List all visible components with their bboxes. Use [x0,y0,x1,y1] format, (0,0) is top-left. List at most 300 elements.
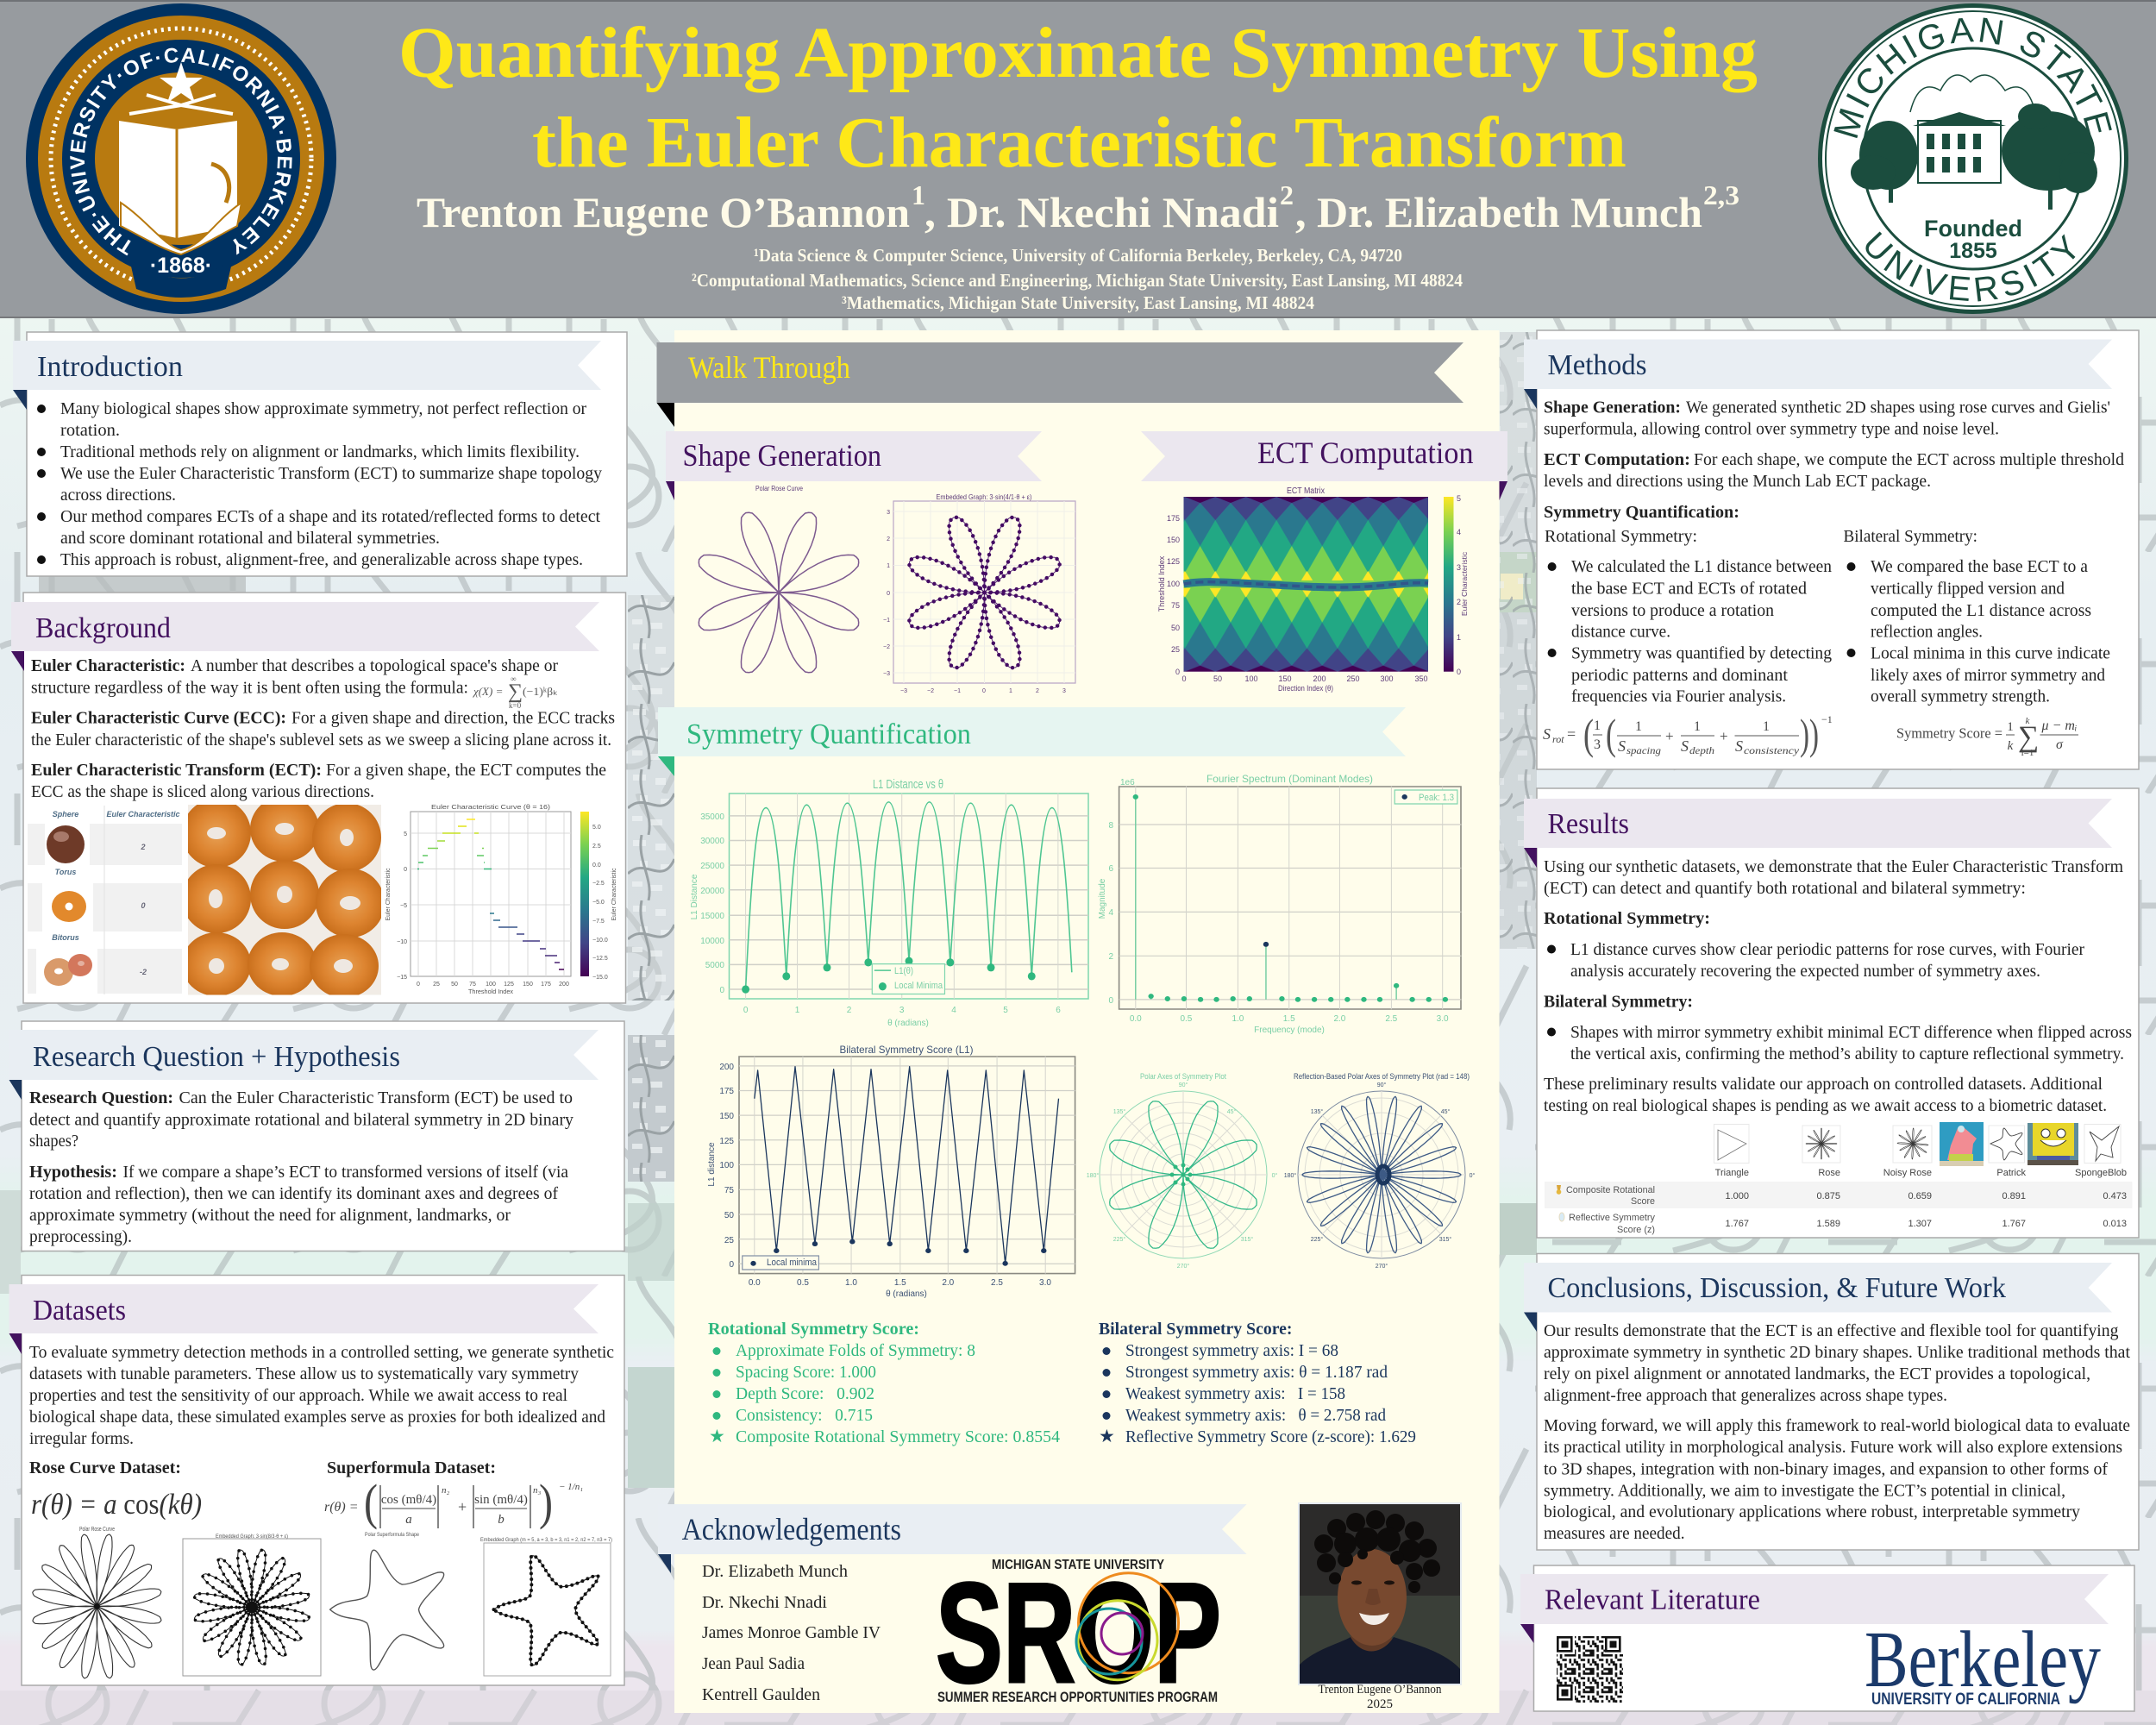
logo: SROP: MICHIGAN STATE UNIVERSITY [992,1558,1164,1572]
formula: rotational score: S [1618,737,1626,755]
background definitions text: the Euler characteristic of the shape's sublevel sets as we sweep a slicing plane across it. [31,731,611,750]
chart: Fourier spectrum: 4 [1108,908,1113,918]
QR code [1557,1636,1623,1703]
formula: Euler characteristic [472,674,558,710]
chart: reflection-based polar axes: 45° [1441,1108,1450,1115]
results table [1545,1122,2132,1235]
rotational symmetry score list: Approximate Folds of Symmetry: 8 [736,1341,975,1360]
chart: ECT matrix heatmap: Euler Characteristic [1460,551,1469,616]
chart: Fourier spectrum: Peak: 1.3 [1419,793,1454,803]
bilateral symmetry score list: Strongest symmetry axis: I = 68 [1125,1341,1338,1360]
chart: Euler characteristic curve: −10.0 [592,938,608,944]
table column labels: Noisy Rose [1883,1168,1932,1178]
chart: bilateral symmetry score: 100 [719,1161,734,1170]
panel: Methods [1524,330,2139,769]
formula: Euler characteristic: χ(X) = [472,685,503,698]
rotational symmetry score list: Depth Score: 0.902 [736,1384,874,1403]
chart: bilateral symmetry score: 125 [719,1137,734,1146]
background definitions text [31,656,615,801]
chart: ECT matrix heatmap: 100 [1244,674,1258,683]
bilateral symmetry score list: Weakest symmetry axis: I = 158 [1125,1384,1345,1403]
chart: ECT matrix heatmap: 4 [1457,528,1461,536]
chart: reflection-based polar axes: 0° [1470,1172,1476,1179]
bilateral symmetry method bullets: We compared the base ECT to a [1871,557,2088,576]
chart: Fourier spectrum: 3.0 [1437,1014,1449,1024]
chart: L1 distance vs theta: θ (radians) [887,1019,929,1028]
chart: ECT matrix heatmap: 1 [1457,633,1461,642]
heading ribbon: Research Question + Hypothesis: Research Question + Hypothesis [33,1041,400,1073]
introduction bullet list [37,399,603,569]
plot: embedded graph 8 petals: −3 [883,671,890,677]
conclusions text: to 3D shapes, integration with non-binary images, and expansion to other forms of [1544,1459,2108,1478]
plot: embedded graph 8 petals: −2 [927,688,934,694]
table: sphere torus bitorus: Bitorus [52,933,79,942]
table row: composite rotational score: 0.875 [1816,1191,1840,1201]
plot: embedded superformula graph [480,1537,612,1676]
chart: bilateral symmetry score: 50 [724,1211,734,1220]
table column labels: Triangle [1715,1168,1749,1178]
research question and hypothesis text: rotation and reflection), then we can identify its dominant axes and degrees of [29,1184,558,1203]
chart: Euler characteristic curve: −15.0 [592,975,608,981]
table row: reflective symmetry score: 1.589 [1816,1219,1840,1229]
heading ribbon: Results [1524,799,2112,868]
chart: Fourier spectrum: 0.0 [1130,1014,1142,1024]
panel: Results [1524,788,2139,1238]
logo: UC Berkeley seal: ·1868· [150,254,212,278]
table row: reflective symmetry score: 0.013 [2103,1219,2127,1229]
heading ribbon: Relevant Literature [1520,1574,2109,1643]
formula: rotational score: 3 [1594,737,1601,752]
research question and hypothesis text: Can the Euler Characteristic Transform (ECT) be used to [179,1088,573,1107]
chart: ECT matrix heatmap: 25 [1171,645,1180,654]
panel: Conclusions, Discussion, & Future Work [1524,1254,2139,1550]
table column labels [1715,1168,2127,1178]
formula: rotational score: ( [1583,710,1594,758]
methods text: superformula, allowing control over symmetry type and noise level. [1544,419,1999,438]
logo: Michigan State seal: Founded [1924,216,2022,242]
chart: Euler characteristic curve: −5 [400,903,407,909]
affiliations [692,245,1463,313]
chart: Fourier spectrum: 0 [1108,996,1113,1006]
shape thumbnails row [1714,1125,2121,1163]
table row: composite rotational score [1545,1182,2132,1208]
chart: L1 distance vs theta: 0 [743,1006,749,1015]
chart: L1 distance vs theta: 25000 [700,862,724,871]
chart: polar axes of symmetry: 270° [1177,1263,1189,1270]
results text [1544,857,2132,1115]
datasets description: Rose Curve Dataset: [29,1458,181,1477]
photo: portrait: 2025 [1367,1697,1393,1711]
rotational symmetry score list: Consistency: 0.715 [736,1406,873,1425]
datasets description: irregular forms. [29,1429,134,1448]
bilateral symmetry score list: Bilateral Symmetry Score: [1099,1320,1292,1339]
chart: reflection-based polar axes: 315° [1439,1236,1451,1243]
results text: Using our synthetic datasets, we demonstrate that the Euler Characteristic Transform [1544,857,2123,876]
formula: symmetry score: σ [2056,737,2064,752]
table row: reflective symmetry score: Score (z) [1617,1225,1655,1235]
formula: superformula: b [498,1513,505,1527]
table: sphere torus bitorus: Sphere [53,810,78,819]
plot: embedded graph 8 petals: −3 [900,688,907,694]
authors [417,179,1739,236]
chart: Euler characteristic curve: −2.5 [592,881,605,887]
chart: Euler characteristic curve: 50 [451,982,458,988]
chart: Fourier spectrum: 1e6 [1120,778,1135,787]
chart: L1 distance vs theta [690,777,1088,1028]
chart: Fourier spectrum: 2 [1108,952,1113,962]
formula: symmetry score [1896,716,2077,758]
rotational symmetry method bullets: distance curve. [1571,623,1670,642]
authors: 1 [912,179,925,210]
chart: polar axes of symmetry: Polar Axes of Symmetry Plot [1140,1072,1226,1082]
chart: Euler characteristic curve [385,803,617,995]
header banner [0,0,2156,318]
conclusions text: measures are needed. [1544,1524,1685,1543]
bilateral symmetry method bullets [1847,557,2110,706]
photo: SpongeBob [2028,1123,2078,1165]
formula: rotational score: S [1735,737,1743,755]
chart: Euler characteristic curve: 150 [523,982,533,988]
chart: Euler characteristic curve: −10 [397,939,407,945]
panel: Background [11,593,626,1003]
chart: reflection-based polar axes: 270° [1376,1263,1388,1270]
acknowledgement names: James Monroe Gamble IV [702,1623,881,1642]
heading ribbon: Symmetry Quantification [658,707,1406,776]
logo: Michigan State seal: UNIVERSITY [1865,231,2075,302]
chart: ECT matrix heatmap: 50 [1213,674,1222,683]
chart: L1 distance vs theta: 0 [719,986,724,995]
chart: Fourier spectrum: 6 [1108,864,1113,874]
conclusions text: Moving forward, we will apply this framework to real-world biological data to evaluate [1544,1416,2130,1435]
chart: ECT matrix heatmap: 200 [1313,674,1326,683]
logo: SROP: SUMMER RESEARCH OPPORTUNITIES PROGRAM [937,1690,1218,1705]
chart: Fourier spectrum: 1.0 [1232,1014,1244,1024]
results text: Shapes with mirror symmetry exhibit minimal ECT difference when flipped across [1570,1023,2132,1042]
formula: superformula: r(θ) = [324,1500,359,1515]
bilateral symmetry method bullets: likely axes of mirror symmetry and [1871,666,2105,685]
background definitions text: Euler Characteristic Transform (ECT): [31,761,322,780]
chart: ECT matrix heatmap: 125 [1167,557,1180,566]
chart: Euler characteristic curve: Threshold Index [468,989,514,995]
chart: bilateral symmetry score: 3.0 [1039,1278,1051,1288]
chart: L1 distance vs theta: Local Minima [894,981,943,991]
chart: reflection-based polar axes: 135° [1311,1108,1323,1115]
chart: bilateral symmetry score: 200 [719,1063,734,1072]
chart: polar axes of symmetry: 315° [1241,1236,1253,1243]
plot: polar rose curve [32,1527,162,1679]
chart: polar axes of symmetry: 135° [1113,1108,1125,1115]
chart: Euler characteristic curve: 5.0 [592,825,601,831]
chart: Fourier spectrum: 0.5 [1180,1014,1193,1024]
results text: These preliminary results validate our approach on controlled datasets. Additional [1544,1075,2103,1094]
table row: composite rotational score: Composite Rotational [1566,1185,1655,1195]
background definitions text: Euler Characteristic Curve (ECC): [31,709,286,728]
formula: superformula: + [458,1498,467,1515]
background definitions text: For a given shape, the ECT computes the [326,761,606,780]
chart: ECT matrix heatmap [1157,486,1469,693]
background definitions text: structure regardless of the way it is bent often using the formula: [31,678,468,697]
formula: symmetry score: k [2026,716,2031,726]
table row: reflective symmetry score: 1.767 [1725,1219,1749,1229]
research question and hypothesis text: Hypothesis: [29,1163,117,1182]
heading ribbon: Walk Through: Walk Through [688,350,850,385]
heading ribbon: Shape Generation: Shape Generation [683,438,881,473]
formula: superformula: sin (mθ/4) [474,1493,528,1507]
formula: superformula: ( [364,1474,378,1530]
chart: L1 distance vs theta: L1(θ) [894,966,913,976]
bilateral symmetry method bullets: reflection angles. [1871,623,1983,642]
chart: ECT matrix heatmap: 175 [1167,514,1180,523]
authors: Trenton Eugene O’Bannon [417,188,910,236]
bilateral symmetry method bullets: computed the L1 distance across [1871,601,2091,620]
table row: reflective symmetry score: 1.767 [2002,1219,2026,1229]
heading ribbon: Introduction [13,341,601,410]
table row: composite rotational score: 0.659 [1908,1191,1932,1201]
conclusions text: rely on pixel alignment or annotated landmarks, the ECT provides a topological, [1544,1364,2090,1383]
chart: ECT matrix heatmap: ECT Matrix [1287,486,1325,496]
plot: embedded graph 8 petals: −2 [883,644,890,650]
chart: bilateral symmetry score: Local minima [767,1258,818,1268]
chart: ECT matrix heatmap: 0 [1175,668,1180,676]
plot: polar superformula shape: Polar Superformula Shape [365,1532,419,1538]
bilateral symmetry score list: Strongest symmetry axis: θ = 1.187 rad [1125,1363,1388,1382]
chart: Euler characteristic curve: 175 [541,982,551,988]
introduction bullet list: Many biological shapes show approximate symmetry, not perfect reflection or [60,399,586,418]
formula: superformula: − 1/n₁ [559,1482,583,1492]
acknowledgement names: Dr. Elizabeth Munch [702,1562,848,1581]
plot: embedded graph 8 petals: Embedded Graph: 3·sin(4/1·θ + ε) [937,493,1032,501]
chart: L1 distance vs theta: 10000 [700,937,724,946]
table row: composite rotational score: 0.891 [2002,1191,2026,1201]
chart: bilateral symmetry score: 2.0 [942,1278,955,1288]
chart: Euler characteristic curve: 0 [417,982,420,988]
research question and hypothesis text [29,1088,574,1246]
chart: L1 distance vs theta: 2 [847,1006,852,1015]
chart: bilateral symmetry score: θ (radians) [886,1289,927,1299]
heading ribbon: Walk Through [657,342,1463,427]
formula: rotational score: S [1543,725,1551,743]
chart: ECT matrix heatmap: 300 [1380,674,1394,683]
methods text: Bilateral Symmetry: [1844,527,1977,546]
table row: reflective symmetry score: 1.307 [1908,1219,1932,1229]
datasets description: Superformula Dataset: [327,1458,496,1477]
chart: ECT matrix heatmap: 2 [1457,598,1461,606]
formula: superformula: n₂ [442,1485,450,1496]
methods text: ECT Computation: [1544,450,1690,469]
formula: superformula: a [405,1513,412,1527]
acknowledgement names: Kentrell Gaulden [702,1685,820,1704]
authors: 2,3 [1703,179,1739,210]
chart: bilateral symmetry score: 2.5 [991,1278,1003,1288]
formula: symmetry score: k [2008,739,2014,753]
formula: rotational score: ( [1606,710,1616,758]
results text: testing on real biological shapes is pending as we await access to a biometric dataset. [1544,1096,2107,1115]
bilateral symmetry score list: ★ [1099,1426,1115,1446]
research question and hypothesis text: If we compare a shape’s ECT to transformed versions of itself (via [122,1163,568,1182]
panel: Research Question + Hypothesis [9,1021,624,1251]
background definitions text: Euler Characteristic: [31,656,185,675]
plot: embedded graph 8 petals [883,493,1075,694]
chart: polar axes of symmetry: 0° [1272,1172,1278,1179]
formula: rotational score: + [1665,728,1674,744]
heading ribbon: ECT Computation [1141,431,1507,500]
rotational symmetry method bullets: periodic patterns and dominant [1571,666,1788,685]
panel: Introduction [13,332,627,576]
introduction bullet list: and score dominant rotational and bilateral symmetries. [60,529,440,548]
table: sphere torus bitorus: Torus [55,868,76,876]
chart: Fourier spectrum: 2.5 [1385,1014,1398,1024]
chart: L1 distance vs theta: 5000 [705,961,724,970]
chart: reflection-based polar axes: 90° [1377,1082,1386,1088]
authors: , Dr. Nkechi Nnadi [924,188,1279,236]
chart: polar axes of symmetry: 45° [1227,1108,1236,1115]
methods text: levels and directions using the Munch Lab ECT package. [1544,472,1931,491]
conclusions text: alignment-free approach that generalizes across shape types. [1544,1386,1947,1405]
title: the Euler Characteristic Transform [532,103,1626,183]
research question and hypothesis text: preprocessing). [29,1227,132,1246]
heading ribbon: Results: Results [1547,808,1629,840]
chart: Fourier spectrum: 1.5 [1283,1014,1295,1024]
chart: ECT matrix heatmap: 250 [1346,674,1360,683]
chart: ECT matrix heatmap: 150 [1167,536,1180,544]
logo: UC Berkeley seal: THE·UNIVERSITY·OF·CALIFORNIA·BERKELEY [70,48,292,255]
chart: L1 distance vs theta: 30000 [700,837,724,846]
chart: Fourier spectrum [1098,773,1461,1035]
chart: bilateral symmetry score: 75 [724,1186,734,1195]
methods text: For each shape, we compute the ECT across multiple threshold [1694,450,2124,469]
chart: L1 distance vs theta: 3 [899,1006,905,1015]
methods text [1544,398,2124,546]
heading ribbon: ECT Computation: ECT Computation [1257,436,1473,470]
formula: superformula: cos (mθ/4) [381,1493,436,1507]
table: sphere torus bitorus [28,806,182,994]
chart: Fourier spectrum: Magnitude [1098,878,1107,919]
logo: UC Berkeley seal [26,3,336,314]
rotational symmetry method bullets: We calculated the L1 distance between [1571,557,1832,576]
heading ribbon: Research Question + Hypothesis [9,1030,599,1100]
chart: Euler characteristic curve: 100 [486,982,496,988]
chart: bilateral symmetry score: 1.5 [894,1278,906,1288]
heading ribbon: Background: Background [35,612,171,644]
conclusions text: biological, and evolutionary applications where robust, interpretable symmetry [1544,1502,2081,1521]
chart: bilateral symmetry score: 25 [724,1236,734,1245]
introduction bullet list: Traditional methods rely on alignment or landmarks, which limits flexibility. [60,442,580,461]
formula: rotational score: 1 [1635,719,1642,734]
introduction bullet list: across directions. [60,486,176,505]
chart: Euler characteristic curve: 25 [433,982,440,988]
formula: rotational score: 1 [1694,719,1701,734]
plot: embedded graph rose: Embedded Graph: 3·sin(8/3·θ + ε) [216,1534,288,1540]
chart: bilateral symmetry score: L1 distance [707,1142,717,1187]
chart: Euler characteristic curve: Euler Characteristic Curve (θ = 16) [431,803,551,811]
formula: rotational score: −1 [1821,713,1833,725]
chart: polar axes of symmetry [1087,1072,1278,1270]
chart: reflection-based polar axes: Reflection-Based Polar Axes of Symmetry Plot (rad = 148) [1294,1072,1470,1082]
chart: ECT matrix heatmap: 3 [1457,563,1461,572]
table row: reflective symmetry score: Reflective Symmetry [1569,1213,1655,1223]
rotational symmetry score list: Spacing Score: 1.000 [736,1363,876,1382]
photo: donuts [188,805,381,995]
plot: embedded graph 8 petals: 0 [982,688,986,694]
chart: bilateral symmetry score: 0 [729,1260,734,1270]
formula: superformula: n₃ [533,1485,542,1496]
plot: embedded graph 8 petals: −1 [954,688,961,694]
affiliations: ²Computational Mathematics, Science and Engineering, Michigan State University, East Lansing, MI 48824 [692,270,1463,291]
table: sphere torus bitorus: 0 [141,901,146,910]
table row: reflective symmetry score [1559,1213,2127,1235]
chart: Euler characteristic curve: 5 [404,831,407,837]
formula: rose curve: r(θ) = a cos(kθ) [31,1489,202,1521]
heading ribbon: Acknowledgements [658,1504,1247,1573]
plot: embedded graph 8 petals: 1 [887,563,890,569]
formula: symmetry score: ∑ [2018,721,2039,753]
research question and hypothesis text: shapes? [29,1132,78,1151]
research question and hypothesis text: Research Question: [29,1088,173,1107]
formula: rotational score: )) [1800,710,1819,758]
chart: Euler characteristic curve: Euler Characteristic [385,868,392,921]
authors: , Dr. Elizabeth Munch [1295,188,1702,236]
chart: ECT matrix heatmap: 100 [1167,580,1180,588]
datasets description: datasets with tunable parameters. These allow us to systematically vary symmetry [29,1364,580,1383]
photo: Patrick [1940,1122,1984,1166]
heading ribbon: Shape Generation [666,431,1042,500]
conclusions text [1544,1321,2130,1543]
chart: Euler characteristic curve: 0 [404,867,407,873]
table: sphere torus bitorus: 2 [140,843,146,851]
acknowledgement names [702,1562,881,1704]
results text: Rotational Symmetry: [1544,909,1710,928]
rotational symmetry method bullets: frequencies via Fourier analysis. [1571,687,1786,706]
bilateral symmetry method bullets: vertically flipped version and [1871,580,2065,599]
chart: Euler characteristic curve: 0.0 [592,862,601,869]
chart: Fourier spectrum: 2.0 [1333,1014,1346,1024]
chart: reflection-based polar axes: 225° [1311,1236,1323,1243]
chart: L1 distance vs theta: 4 [951,1006,956,1015]
datasets description: To evaluate symmetry detection methods in a controlled setting, we generate synthetic [29,1343,614,1362]
formula: symmetry score: Symmetry Score = [1896,724,2002,742]
chart: reflection-based polar axes [1284,1072,1476,1270]
chart: Euler characteristic curve: −15 [397,975,407,981]
chart: ECT matrix heatmap: 0 [1181,674,1187,683]
formula: rotational score: = [1567,725,1576,743]
chart: L1 distance vs theta: 6 [1056,1006,1061,1015]
bilateral symmetry method bullets: Local minima in this curve indicate [1871,643,2110,662]
affiliations: ³Mathematics, Michigan State University, East Lansing, MI 48824 [842,292,1314,313]
chart: ECT matrix heatmap: 75 [1171,601,1180,610]
panel: Relevant Literature [1520,1565,2134,1711]
heading ribbon: Introduction: Introduction [37,351,183,383]
formula: symmetry score: i=1 [2021,748,2034,758]
acknowledgement names: Jean Paul Sadia [702,1654,805,1673]
chart: bilateral symmetry score: Bilateral Symmetry Score (L1) [840,1044,973,1056]
background definitions text: For a given shape and direction, the ECC tracks [291,709,615,728]
rotational symmetry score list: ★ [709,1426,725,1446]
chart: ECT matrix heatmap: Direction Index (θ) [1278,684,1333,693]
formula: rotational score: 1 [1763,719,1770,734]
plot: embedded graph 8 petals: 3 [1062,688,1066,694]
logo: Berkeley wordmark: UNIVERSITY OF CALIFORNIA [1871,1690,2060,1709]
chart: L1 distance vs theta: 5 [1003,1006,1008,1015]
conclusions text: its practical utility in morphological analysis. Future work will also explore extensions [1544,1438,2122,1457]
panel: Walk Through [657,330,1507,1713]
chart: Euler characteristic curve: −12.5 [592,956,608,962]
rotational symmetry score list: Composite Rotational Symmetry Score: 0.8554 [736,1427,1060,1446]
photo: portrait [1298,1502,1462,1711]
heading ribbon: Methods: Methods [1547,349,1647,381]
plot: embedded graph 8 petals: 2 [1036,688,1039,694]
logo: Michigan State seal [1818,3,2128,314]
results text: (ECT) can detect and quantify both rotational and bilateral symmetry: [1544,879,2026,898]
